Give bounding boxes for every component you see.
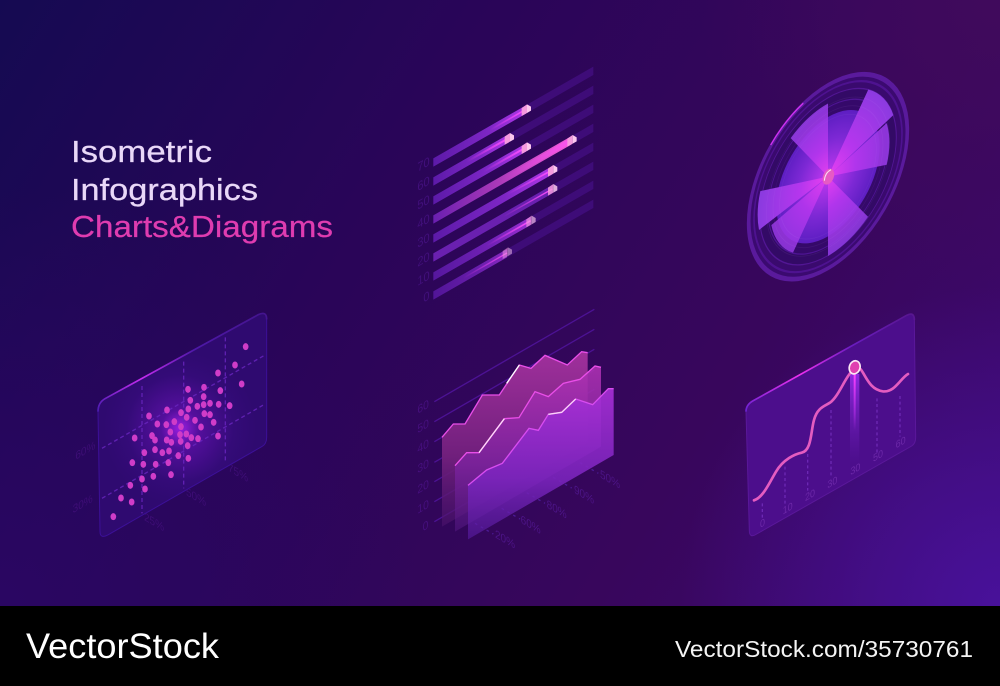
grid bbox=[102, 337, 265, 513]
y axis labels: 50 bbox=[417, 416, 429, 436]
axis labels: 10 bbox=[783, 501, 793, 518]
axis labels: 60 bbox=[896, 435, 906, 452]
panel: scatter plot bbox=[73, 313, 267, 536]
panel: line chart bbox=[746, 314, 916, 536]
axis labels: 30 bbox=[417, 230, 430, 251]
panel: horizontal bar chart bbox=[417, 67, 593, 306]
bar tracks bbox=[433, 67, 593, 300]
board highlight edge bbox=[98, 313, 267, 412]
y axis labels: 60 bbox=[417, 396, 429, 417]
sector rings bbox=[766, 70, 890, 283]
axis labels bbox=[760, 435, 906, 531]
board bbox=[98, 313, 267, 536]
axis labels: 10 bbox=[417, 268, 430, 289]
y axis labels bbox=[417, 396, 429, 534]
axis labels: 40 bbox=[417, 211, 430, 232]
board bbox=[746, 314, 916, 536]
axis labels: 60 bbox=[417, 173, 430, 194]
axis labels: 30 bbox=[850, 461, 861, 478]
x axis labels bbox=[495, 468, 620, 552]
axis labels: 30% bbox=[73, 493, 93, 516]
axis labels: 0 bbox=[760, 517, 765, 531]
y axis labels: 20 bbox=[417, 476, 429, 497]
x axis labels: 80% bbox=[547, 498, 567, 522]
axis labels: 75% bbox=[228, 462, 248, 485]
outer rim bbox=[749, 39, 907, 314]
inner disc bbox=[776, 87, 880, 266]
x axis labels: 50% bbox=[600, 468, 620, 492]
center hub bbox=[820, 167, 836, 186]
series: middle area bbox=[455, 366, 601, 532]
watermark url: VectorStock.com/35730761 bbox=[675, 636, 973, 662]
board highlight edge bbox=[746, 314, 914, 412]
axis labels: 0 bbox=[423, 288, 429, 306]
bar values bbox=[433, 105, 572, 300]
x axis labels: 90% bbox=[574, 484, 594, 507]
axis labels: 20 bbox=[417, 249, 430, 270]
title: Charts&Diagrams bbox=[71, 210, 333, 244]
axis labels bbox=[417, 154, 430, 306]
x axis labels: 20% bbox=[495, 528, 515, 552]
peak marker bbox=[848, 359, 862, 375]
watermark brand: VectorStock bbox=[26, 627, 220, 666]
axis labels: 70 bbox=[417, 154, 430, 175]
footer bar bbox=[0, 606, 1000, 686]
highlight beam bbox=[850, 374, 859, 464]
axis labels: 60% bbox=[75, 439, 95, 463]
sectors bbox=[758, 66, 893, 297]
title: Isometric bbox=[71, 135, 212, 169]
y axis labels: 10 bbox=[417, 496, 429, 517]
y axis labels: 0 bbox=[423, 517, 429, 534]
data points bbox=[110, 343, 248, 520]
title: Infographics bbox=[71, 173, 258, 207]
axis labels: 25% bbox=[144, 511, 164, 535]
series: back area bbox=[442, 352, 588, 527]
value markers bbox=[503, 104, 577, 259]
x axis ticks bbox=[475, 463, 598, 534]
curve bbox=[754, 368, 908, 500]
grid lines bbox=[434, 309, 594, 522]
axis labels: 50% bbox=[186, 486, 206, 510]
axis labels bbox=[73, 439, 248, 535]
axis labels: 50 bbox=[873, 448, 883, 465]
axis labels: 30 bbox=[827, 475, 838, 492]
series: front area bbox=[468, 389, 614, 539]
panel: layered area chart bbox=[417, 309, 620, 552]
axis labels: 20 bbox=[805, 487, 815, 504]
y axis labels: 30 bbox=[417, 456, 429, 476]
dashed guides bbox=[762, 396, 900, 518]
title bbox=[71, 135, 333, 244]
panel: radar chart bbox=[749, 39, 907, 314]
y axis labels: 40 bbox=[417, 436, 429, 456]
axis labels: 50 bbox=[417, 192, 430, 213]
x axis labels: 60% bbox=[521, 514, 541, 537]
